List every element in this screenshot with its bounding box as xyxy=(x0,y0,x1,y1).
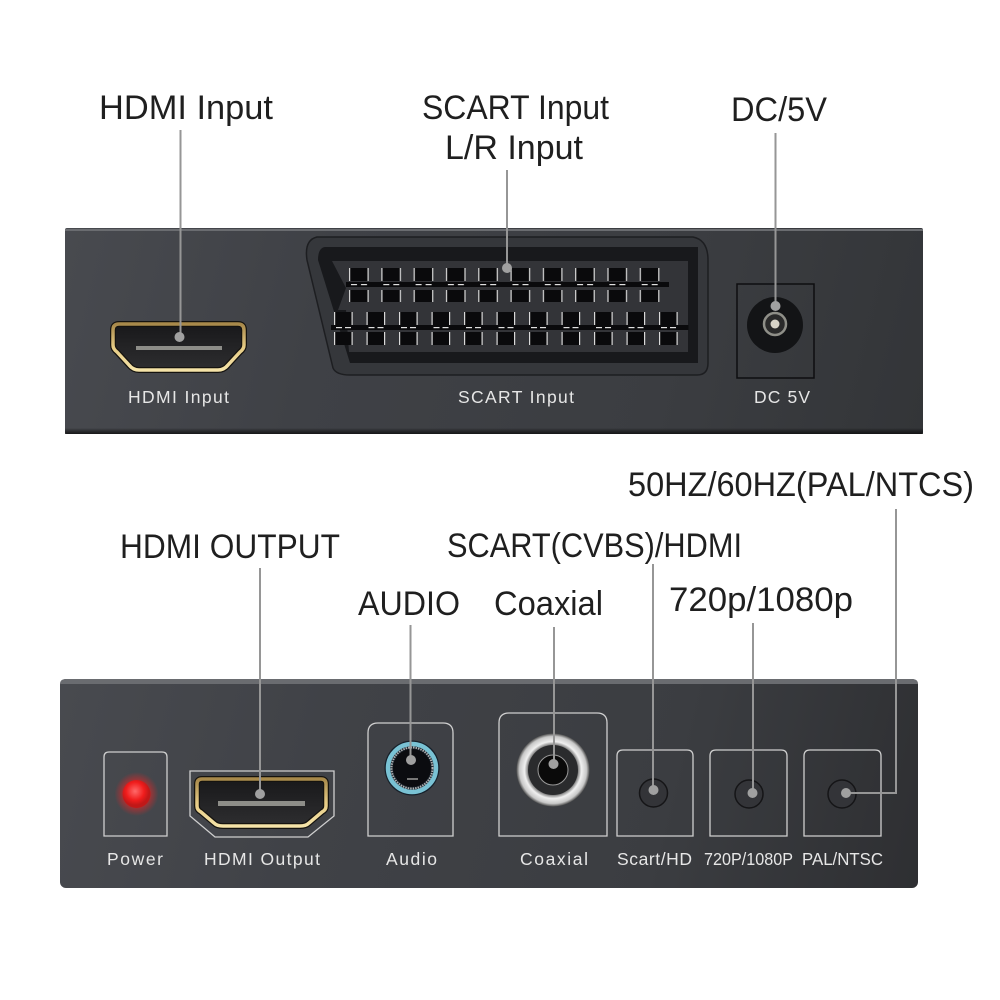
label: DC 5V: DC 5V xyxy=(754,387,810,407)
leader line: DC/5V xyxy=(770,133,780,311)
label: HDMI Input: HDMI Input xyxy=(128,387,229,407)
label: 720P/1080P: 720P/1080P xyxy=(704,849,793,869)
heading: HDMI Input: HDMI Input xyxy=(99,89,274,127)
leader line: HDMI Input xyxy=(174,130,184,342)
icon: DC 5V jack xyxy=(737,284,814,378)
leader line: HDMI OUTPUT xyxy=(255,568,265,799)
heading: SCART Input L/R Input xyxy=(422,89,610,167)
heading: SCART Input L/R Input: L/R Input xyxy=(445,129,584,167)
leader line: 50HZ/60HZ xyxy=(841,509,896,798)
leader line: SCART(CVBS)/HDMI xyxy=(648,564,658,795)
icon: SCART connector xyxy=(306,237,708,375)
icon: PAL/NTSC button xyxy=(804,750,881,836)
icon: coaxial jack xyxy=(499,713,607,836)
heading: SCART(CVBS)/HDMI: SCART(CVBS)/HDMI xyxy=(447,527,742,565)
icon: HDMI output port xyxy=(190,771,334,837)
label: Power: Power xyxy=(107,849,163,869)
label: Coaxial: Coaxial xyxy=(520,849,588,869)
heading: AUDIO: AUDIO xyxy=(358,585,460,623)
icon: power LED xyxy=(104,752,167,836)
leader line: AUDIO xyxy=(406,625,416,765)
heading: Coaxial: Coaxial xyxy=(494,585,603,623)
icon: HDMI input port xyxy=(113,324,244,370)
heading: HDMI OUTPUT: HDMI OUTPUT xyxy=(120,528,340,566)
label: Scart/HD: Scart/HD xyxy=(617,849,692,869)
label: PAL/NTSC: PAL/NTSC xyxy=(802,849,883,869)
label: HDMI Output: HDMI Output xyxy=(204,849,320,869)
label: SCART Input: SCART Input xyxy=(458,387,574,407)
heading: 720p/1080p: 720p/1080p xyxy=(669,581,853,619)
heading: DC/5V: DC/5V xyxy=(731,91,827,129)
leader line: 720p/1080p xyxy=(748,623,758,798)
heading: SCART Input L/R Input: SCART Input xyxy=(422,89,610,127)
leader line: Coaxial xyxy=(548,627,558,769)
icon: 720P/1080P button xyxy=(710,750,787,836)
panel: front device xyxy=(60,679,918,888)
panel: rear device xyxy=(65,228,923,434)
label: Audio: Audio xyxy=(386,849,437,869)
icon: audio jack xyxy=(368,723,453,836)
icon: Scart/HD button xyxy=(617,750,693,836)
heading: 50HZ/60HZ(PAL/NTCS): 50HZ/60HZ(PAL/NTCS) xyxy=(628,466,974,504)
leader line: SCART Input xyxy=(502,170,512,273)
